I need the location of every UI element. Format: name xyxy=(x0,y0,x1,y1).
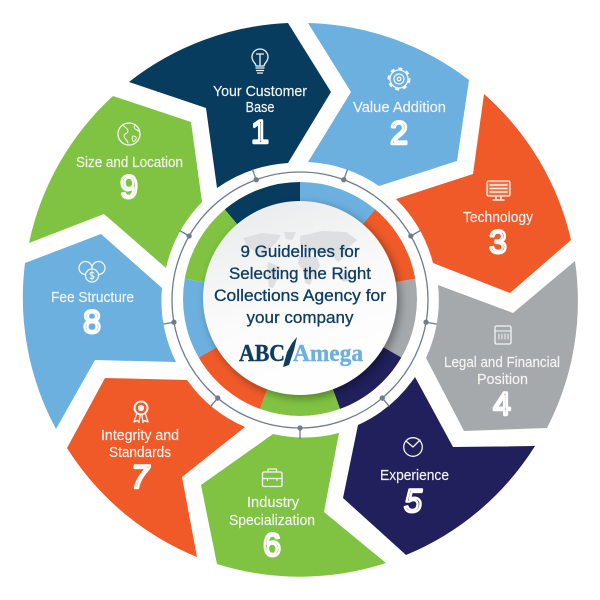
number 7: 7 xyxy=(131,459,150,495)
inner colour ring xyxy=(183,182,417,416)
icon: clock xyxy=(404,438,422,456)
icon: monitor xyxy=(487,181,510,200)
label: fee structure: Fee Structure xyxy=(51,289,134,306)
number 8: 8 xyxy=(83,304,101,340)
number 3: 3 xyxy=(489,224,507,260)
label: legal and financial position xyxy=(444,354,560,388)
panel 7: integrity and standards xyxy=(67,378,245,557)
world map watermark xyxy=(243,231,357,288)
icon: coins xyxy=(79,262,105,282)
logo: ABC/Amega: Amega xyxy=(293,341,363,367)
label: your customer base xyxy=(213,83,307,116)
center disc xyxy=(203,201,397,395)
panel 4: legal and financial position xyxy=(426,261,578,431)
panel 8: fee structure xyxy=(23,234,176,429)
label: technology: Technology xyxy=(463,209,533,226)
number 6: 6 xyxy=(263,527,281,563)
label: your customer base: Base xyxy=(246,99,274,116)
logo: ABC/Amega xyxy=(239,337,363,367)
icon: award ribbon xyxy=(134,402,148,422)
panel 2: value addition xyxy=(308,23,469,186)
center title: Selecting the Right xyxy=(229,264,371,283)
label: integrity and standards: Integrity and xyxy=(101,427,179,444)
outer thin ring with ticks xyxy=(163,169,437,439)
panel 9: size and location xyxy=(29,96,202,268)
label: size and location: Size and Location xyxy=(76,154,183,171)
icon: globe xyxy=(118,123,140,145)
center title: Collections Agency for xyxy=(214,286,386,305)
label: industry specialization: Specialization xyxy=(229,512,315,529)
panel 3: technology xyxy=(396,94,571,293)
label: your customer base: Your Customer xyxy=(213,83,307,100)
number 1: 1 xyxy=(251,114,269,150)
label: legal and financial position: Legal and Financial xyxy=(444,354,560,371)
number 2: 2 xyxy=(390,115,408,151)
panel 6: industry specialization xyxy=(201,433,386,577)
icon: gear xyxy=(389,69,409,89)
label: integrity and standards xyxy=(101,427,179,461)
icon: calendar xyxy=(495,326,511,344)
label: experience: Experience xyxy=(380,467,449,484)
panel 5: experience xyxy=(343,377,535,555)
logo: ABC/Amega: ABC xyxy=(239,341,285,367)
label: value addition: Value Addition xyxy=(353,99,446,116)
number 9: 9 xyxy=(120,169,138,205)
label: industry specialization xyxy=(229,494,315,529)
icon: briefcase xyxy=(262,469,282,486)
label: industry specialization: Industry xyxy=(247,494,299,511)
label: integrity and standards: Standards xyxy=(109,444,171,461)
center title xyxy=(214,242,386,327)
number 5: 5 xyxy=(404,483,422,519)
icon: light bulb xyxy=(252,49,268,73)
panel 1: your customer base xyxy=(129,23,331,188)
label: legal and financial position: Position xyxy=(477,371,528,388)
number 4: 4 xyxy=(493,386,511,422)
center title: your company xyxy=(246,308,354,327)
center title: 9 Guidelines for xyxy=(240,242,360,261)
center disc shadow xyxy=(205,203,401,399)
